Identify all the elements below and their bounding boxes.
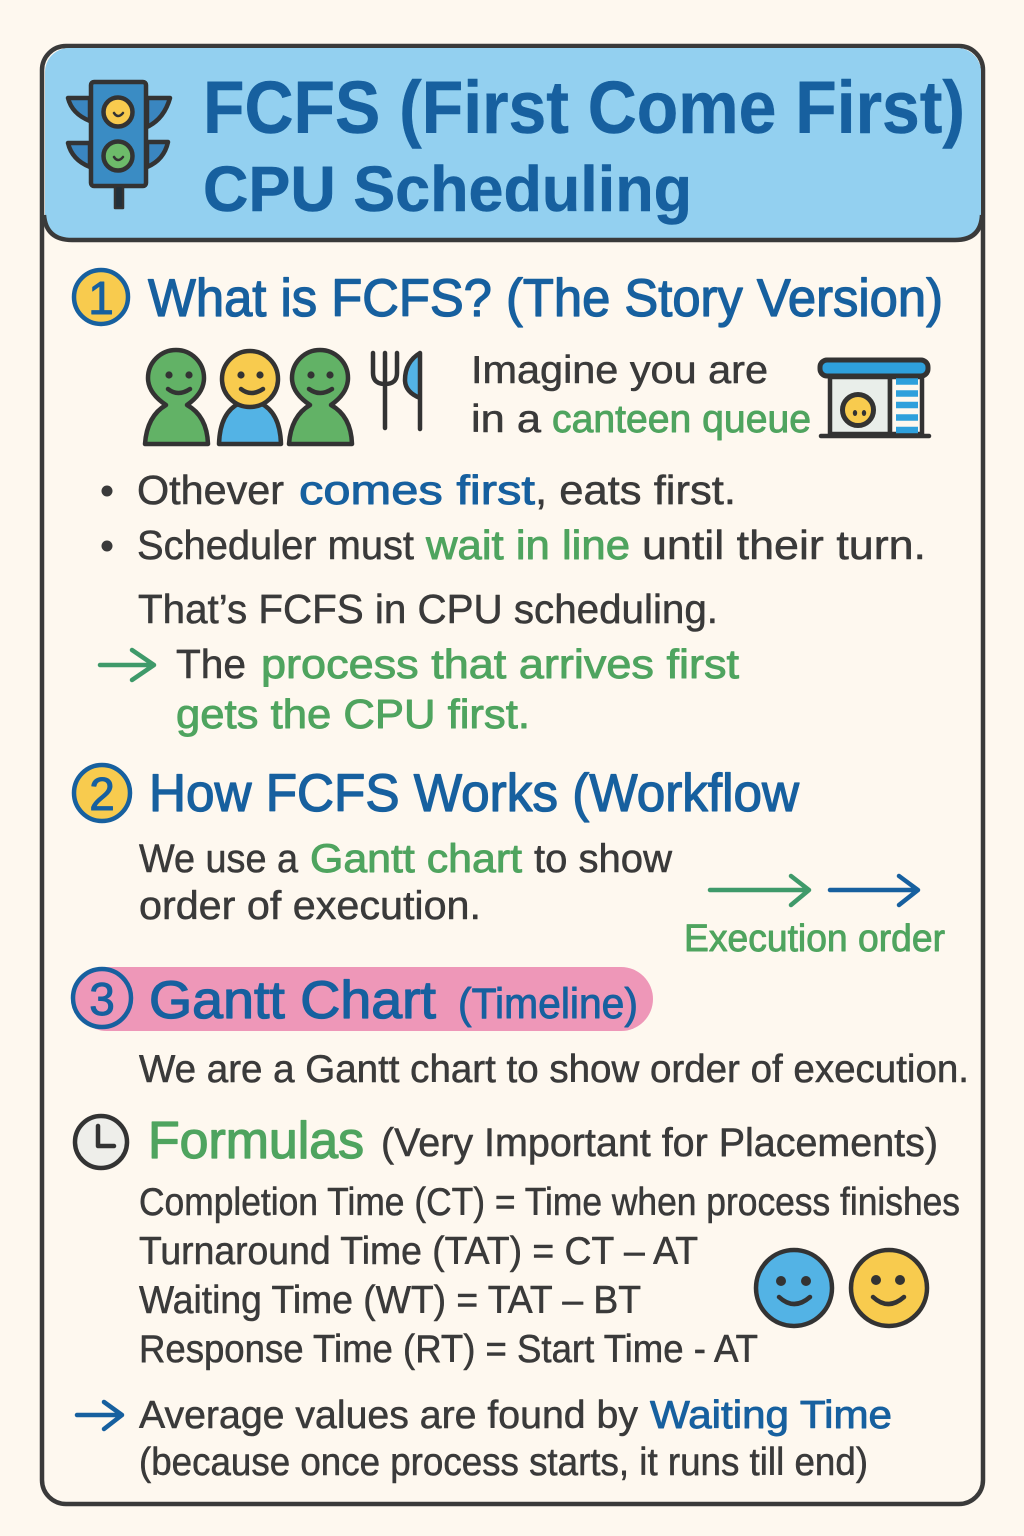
bullet list: comes first bbox=[299, 467, 536, 513]
formulas heading: Formulas bbox=[148, 1112, 364, 1170]
key takeaway text: gets the CPU first. bbox=[176, 691, 530, 737]
average values note: (because once process starts, it runs till end) bbox=[139, 1441, 868, 1484]
explanation text: That’s FCFS in CPU scheduling. bbox=[138, 586, 718, 632]
key takeaway text: process that arrives first bbox=[261, 641, 740, 687]
key takeaway text bbox=[176, 641, 740, 737]
section 3 heading: Gantt Chart bbox=[149, 971, 436, 1030]
gantt intro text: Gantt chart bbox=[310, 837, 522, 881]
icon: yellow smiley bbox=[851, 1250, 927, 1326]
section 1 heading: 1 bbox=[88, 272, 114, 324]
gantt description: We are a Gantt chart to show order of execution. bbox=[139, 1048, 969, 1091]
section 3 heading bbox=[73, 967, 653, 1031]
canteen text: canteen queue bbox=[552, 398, 811, 441]
icon: traffic light bbox=[68, 82, 170, 208]
title: FCFS (First Come First) bbox=[203, 66, 965, 149]
key takeaway text: The bbox=[176, 641, 246, 687]
gantt intro text: We use a bbox=[139, 837, 299, 881]
formulas list: Completion Time (CT) = Time when process finishes bbox=[139, 1181, 960, 1224]
canteen text: Imagine you are bbox=[471, 349, 768, 392]
formulas list bbox=[139, 1181, 960, 1371]
canteen text: in a bbox=[471, 398, 541, 441]
average values note bbox=[139, 1394, 892, 1484]
average values note: Average values are found by bbox=[139, 1394, 638, 1437]
bullet list bbox=[102, 467, 926, 568]
arrow: blue bbox=[77, 1402, 122, 1429]
section 2 heading: How FCFS Works (Workflow bbox=[149, 764, 800, 823]
execution order arrows bbox=[710, 876, 918, 905]
bullet list: Scheduler must bbox=[137, 522, 415, 568]
gantt intro text bbox=[139, 837, 672, 928]
formulas list: Response Time (RT) = Start Time - AT bbox=[139, 1328, 758, 1371]
execution order label: Execution order bbox=[684, 918, 945, 960]
canteen text bbox=[471, 349, 811, 441]
title: CPU Scheduling bbox=[203, 153, 692, 225]
formulas heading: (Very Important for Placements) bbox=[381, 1121, 938, 1165]
section 3 heading: (Timeline) bbox=[458, 980, 638, 1028]
section 1 heading: What is FCFS? (The Story Version) bbox=[148, 269, 943, 328]
bullet list: wait in line bbox=[425, 522, 630, 568]
bullet list: until their turn. bbox=[642, 522, 926, 568]
gantt intro text: order of execution. bbox=[139, 884, 481, 928]
bullet list: , eats first. bbox=[535, 467, 736, 513]
section 2 heading: 2 bbox=[89, 768, 115, 820]
section 3 heading: 3 bbox=[89, 973, 115, 1025]
title bbox=[203, 66, 965, 225]
formulas list: Turnaround Time (TAT) = CT – AT bbox=[139, 1230, 698, 1273]
gantt intro text: to show bbox=[534, 837, 672, 881]
formulas heading bbox=[148, 1112, 938, 1170]
icon: three people bbox=[145, 350, 352, 444]
formulas list: Waiting Time (WT) = TAT – BT bbox=[139, 1279, 641, 1322]
icon: fork and knife bbox=[373, 353, 420, 429]
header banner bbox=[44, 48, 982, 240]
average values note: Waiting Time bbox=[650, 1394, 892, 1437]
icon: canteen shop bbox=[820, 360, 929, 436]
icon: blue smiley bbox=[756, 1250, 832, 1326]
arrow: green bbox=[100, 650, 154, 680]
icon: clock bbox=[75, 1116, 127, 1168]
bullet list: Othever bbox=[137, 467, 284, 513]
